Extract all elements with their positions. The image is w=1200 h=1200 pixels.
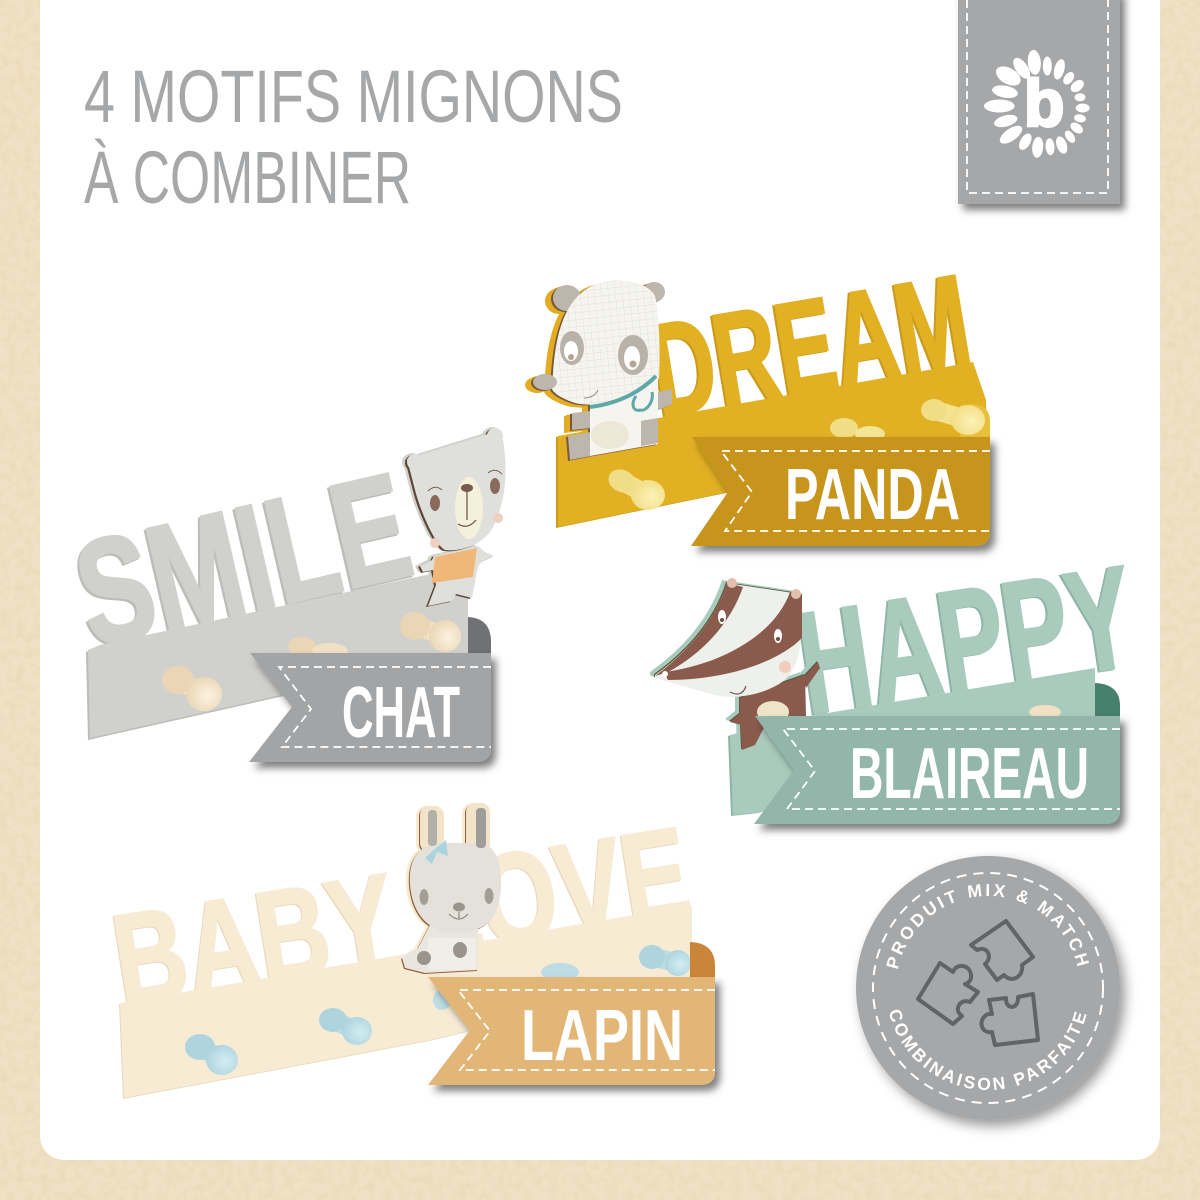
peg <box>162 666 222 711</box>
board: DREAM <box>558 247 986 527</box>
icon: puzzle pieces <box>918 921 1038 1045</box>
product: rabbit BABY LOVE coat rack <box>104 799 715 1098</box>
arms and legs <box>568 389 672 460</box>
board: SMILE: SMILE <box>61 440 425 679</box>
ribbon label: PANDA: PANDA <box>785 455 960 535</box>
title: 4 MOTIFS MIGNONS <box>84 55 623 138</box>
character: cat <box>407 428 506 606</box>
panda face details <box>560 331 658 449</box>
badge text <box>886 884 1089 1090</box>
peg <box>830 418 885 442</box>
title: À COMBINER <box>84 136 411 219</box>
board: BABY LOVE <box>104 799 699 1098</box>
peg <box>433 963 579 1010</box>
peg <box>639 945 691 976</box>
ribbon label: CHAT <box>249 653 491 762</box>
icon: flower logo: b <box>1024 66 1064 140</box>
title <box>84 55 623 219</box>
board: HAPPY <box>730 535 1144 815</box>
board: DREAM: DREAM <box>640 247 980 445</box>
brand tag with logo <box>958 0 1120 204</box>
peg <box>921 399 985 435</box>
character: rabbit <box>402 803 501 973</box>
icon: flower logo <box>984 49 1090 158</box>
peg <box>400 612 461 652</box>
peg <box>288 637 348 659</box>
ribbon fold <box>468 617 491 653</box>
peg <box>185 1034 238 1075</box>
ribbon fold <box>960 404 990 437</box>
ribbon label: CHAT: CHAT <box>342 673 460 753</box>
product: panda DREAM coat rack <box>533 247 990 546</box>
ribbon fold <box>690 942 715 977</box>
product: badger HAPPY coat rack <box>655 535 1144 824</box>
peg <box>605 465 665 510</box>
badge text: PRODUIT MIX & MATCH <box>886 884 1089 969</box>
body <box>590 378 658 456</box>
ribbon label: BLAIREAU <box>754 716 1120 824</box>
ribbon label: LAPIN <box>428 977 715 1085</box>
ribbon fold <box>1095 683 1120 716</box>
board: BABY LOVE: BABY LOVE <box>104 799 699 1034</box>
ribbon label: LAPIN: LAPIN <box>521 996 683 1076</box>
head <box>552 280 660 405</box>
product: cat SMILE coat rack <box>61 428 506 762</box>
peg <box>319 1008 372 1045</box>
badge: mix and match <box>853 854 1133 1134</box>
rabbit details <box>417 808 494 970</box>
cat details <box>428 470 503 583</box>
ribbon label: PANDA <box>691 437 990 546</box>
badger details <box>655 578 802 723</box>
character: panda <box>533 280 672 460</box>
board: SMILE <box>61 440 468 738</box>
peg <box>1029 705 1061 719</box>
badge text: COMBINAISON PARFAITE <box>890 1010 1086 1090</box>
character: badger <box>655 583 820 750</box>
